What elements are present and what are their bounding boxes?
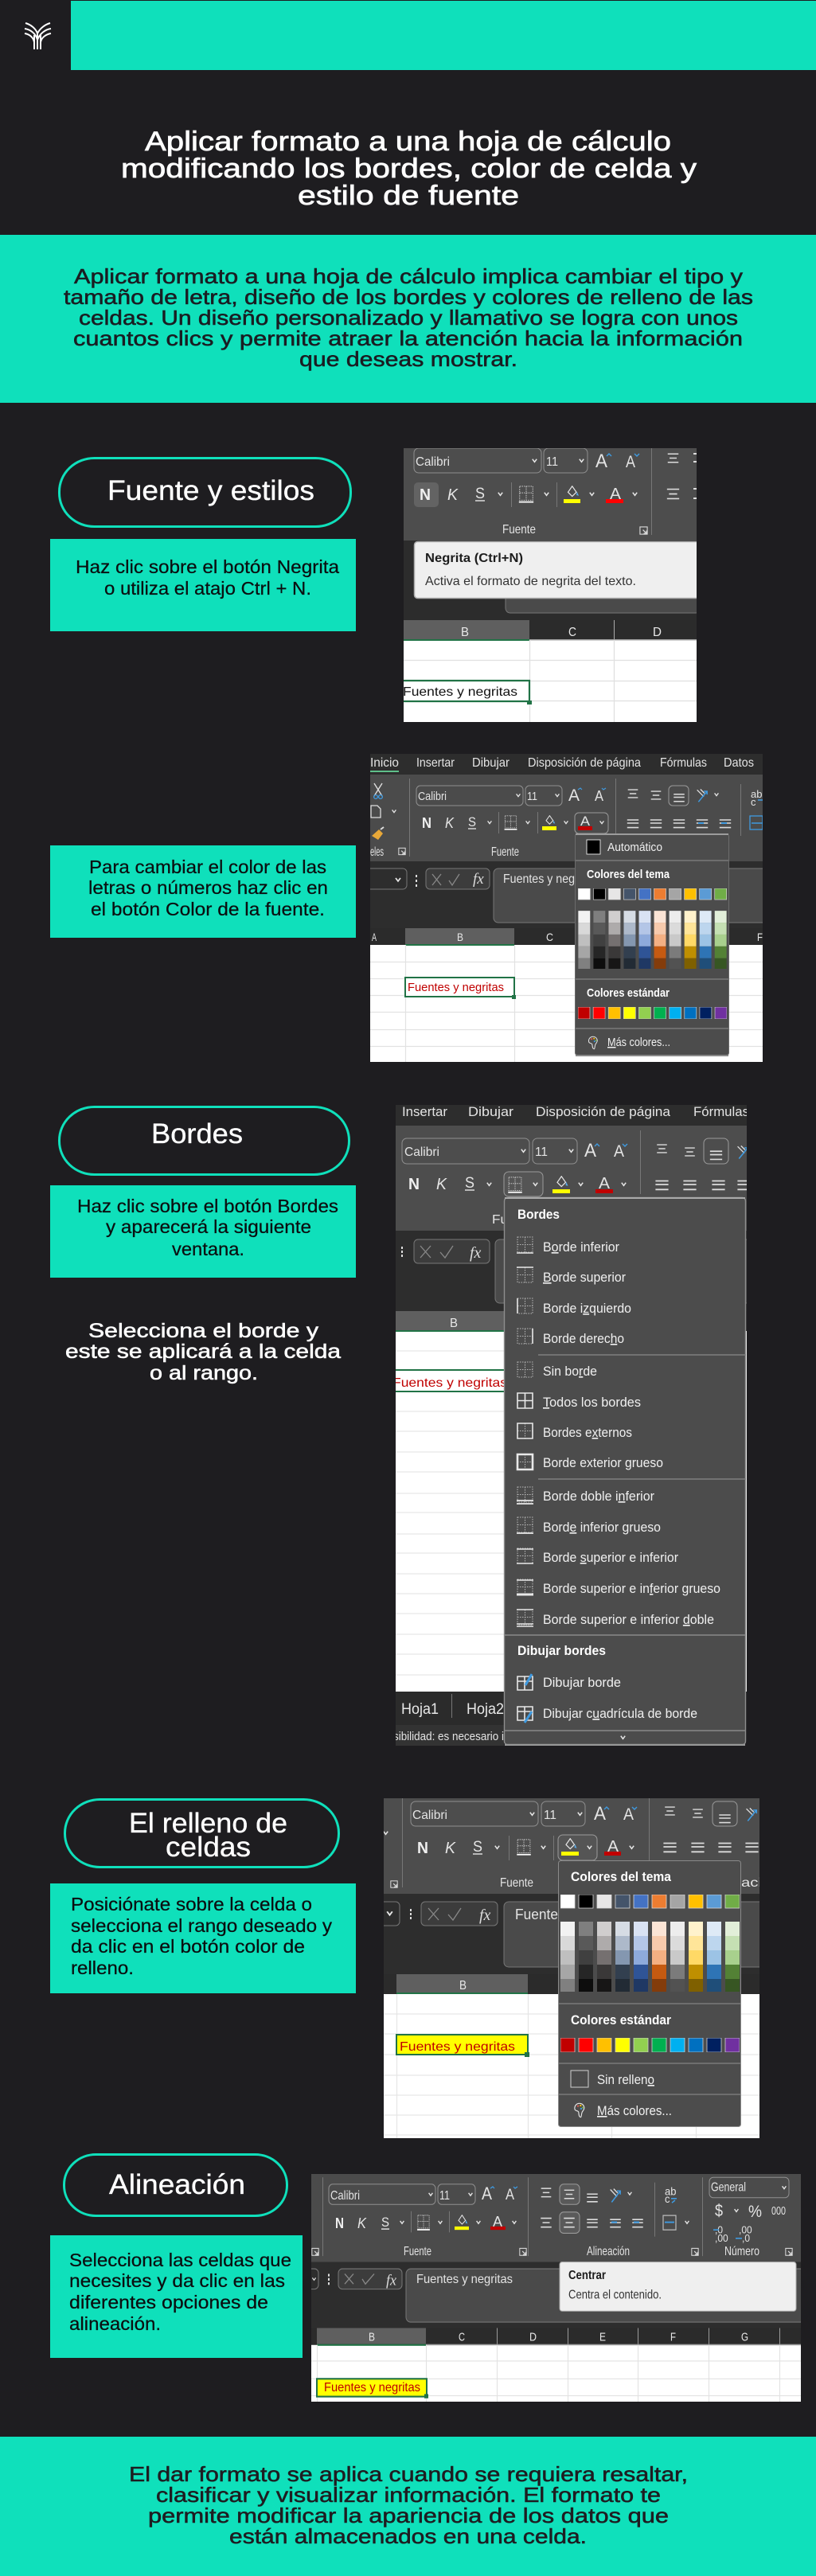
tooltip: negrita (414, 541, 701, 599)
callout: bordes: ventana. (172, 1239, 244, 1259)
screenshot: relleno: aci (741, 1876, 762, 1890)
title (121, 127, 697, 211)
heading pill: Bordes: Bordes (151, 1118, 243, 1149)
dropdown: color de fuente: Automático (607, 841, 662, 854)
dropdown: menú bordes: Borde exterior grueso (543, 1456, 663, 1470)
callout: relleno: Posiciónate sobre la celda o (71, 1894, 312, 1914)
screenshot: alineación: K (357, 2215, 367, 2231)
callout: alineación (50, 2235, 303, 2358)
screenshot: alineación: N (335, 2215, 344, 2231)
screenshot: negrita: 11 (546, 455, 558, 469)
screenshot: alineación: Fuente (404, 2245, 431, 2258)
screenshot: alineación: A (506, 2185, 515, 2203)
screenshot: color de fuente: B (457, 931, 463, 943)
dropdown: menú bordes: Borde derecho (543, 1332, 624, 1346)
screenshot: negrita: Fuentes y negritas (403, 685, 517, 699)
screenshot: bordes: 11 (535, 1146, 548, 1159)
screenshot: color de fuente: Calibri (418, 790, 447, 803)
closing band: están almacenados en una celda. (229, 2524, 587, 2548)
screenshot: relleno: 11 (544, 1809, 556, 1822)
screenshot: bordes: A (614, 1142, 624, 1161)
screenshot: bordes: A (584, 1140, 596, 1161)
dropdown: menú bordes: Borde superior e inferior grueso (543, 1582, 720, 1596)
screenshot: alineación: Calibri (330, 2189, 360, 2203)
callout: relleno: relleno. (71, 1957, 134, 1978)
dropdown: color de fuente (575, 834, 729, 1056)
heading pill: El relleno de celdas: celdas (166, 1832, 251, 1863)
dropdown: color de relleno: Colores estándar (571, 2012, 671, 2028)
screenshot: negrita (403, 448, 697, 722)
screenshot: alineación: Número (724, 2245, 759, 2258)
title: estilo de fuente (298, 181, 519, 211)
screenshot: alineación: E (599, 2331, 606, 2344)
callout: color de fuente: letras o números haz clic en (88, 877, 328, 898)
screenshot: bordes: A (599, 1175, 611, 1192)
dropdown: menú bordes: Borde superior e inferior doble (543, 1613, 714, 1627)
text: selecciona el borde: o al rango. (150, 1362, 258, 1384)
screenshot: color de fuente (370, 754, 763, 1062)
screenshot: negrita: N (420, 486, 431, 504)
screenshot: color de fuente: C (546, 931, 553, 943)
screenshot: alineación: F (670, 2331, 676, 2344)
screenshot: relleno: Fuente (515, 1907, 558, 1922)
screenshot: color de fuente: Disposición de página (528, 756, 641, 770)
screenshot: bordes (392, 1104, 749, 1746)
screenshot: alineación: General (711, 2180, 746, 2194)
callout: bordes: Haz clic sobre el botón Bordes (77, 1196, 338, 1216)
intro band: cuantos clics y permite atraer la atención hacia la información (73, 326, 743, 350)
screenshot: color de fuente: Fuentes y negritas (408, 981, 504, 994)
screenshot: bordes: K (436, 1176, 448, 1193)
screenshot: bordes: Hoja2 (467, 1701, 504, 1718)
dropdown: menú bordes: Borde superior e inferior (543, 1551, 678, 1565)
screenshot: color de fuente: A (595, 788, 603, 804)
screenshot: alineación: Fuentes y negritas (324, 2381, 420, 2395)
screenshot: color de fuente: S (468, 814, 476, 829)
title: Aplicar formato a una hoja de cálculo (145, 127, 671, 157)
intro band: tamaño de letra, diseño de los bordes y colores de relleno de las (64, 285, 753, 309)
dropdown: menú bordes: Dibujar borde (543, 1676, 621, 1690)
screenshot: color de fuente: eles (370, 845, 384, 859)
callout: alineación: diferentes opciones de (69, 2292, 268, 2313)
dropdown: menú bordes: Bordes externos (543, 1426, 632, 1440)
callout: relleno (50, 1883, 356, 1993)
screenshot: color de fuente: Fuente (491, 845, 519, 859)
callout: color de fuente: el botón Color de la fuente. (91, 899, 325, 919)
callout: negrita (50, 539, 356, 631)
dropdown: color de relleno (559, 1861, 740, 2127)
screenshot: color de fuente: Fuentes y neg (503, 872, 575, 886)
screenshot: negrita: A (610, 486, 622, 503)
intro band (0, 235, 816, 403)
screenshot: color de fuente: F (757, 931, 763, 943)
dropdown: menú bordes: Bordes (517, 1208, 560, 1222)
callout: bordes (50, 1185, 356, 1278)
screenshot: color de fuente: ab (751, 788, 762, 800)
screenshot: relleno: S (473, 1839, 482, 1856)
screenshot: alineación: 000 (771, 2205, 786, 2218)
icon: palm logo (25, 23, 51, 49)
callout: color de fuente (50, 845, 356, 938)
callout: negrita: Haz clic sobre el botón Negrita (76, 556, 339, 577)
tooltip: centrar: Centra el contenido. (568, 2288, 662, 2301)
screenshot: negrita: A (626, 453, 635, 471)
heading pill: El relleno de celdas: El relleno de (129, 1808, 287, 1839)
heading pill: Alineación: Alineación (109, 2169, 245, 2200)
screenshot: bordes: Hoja1 (401, 1701, 439, 1718)
screenshot: color de fuente: fx (473, 871, 484, 888)
screenshot: color de fuente: A (372, 931, 377, 943)
heading pill: Fuente y estilos (59, 459, 350, 527)
screenshot: relleno: Fuentes y negritas (400, 2040, 515, 2054)
dropdown: color de relleno: Más colores... (597, 2104, 672, 2118)
screenshot: color de fuente: 11 (527, 790, 537, 803)
screenshot: bordes: fx (470, 1244, 482, 1262)
screenshot: alineación: % (748, 2203, 762, 2221)
screenshot: negrita: Calibri (416, 455, 450, 469)
screenshot: relleno: N (417, 1840, 428, 1857)
screenshot: alineación: D (529, 2331, 537, 2344)
screenshot: alineación: A (482, 2183, 492, 2203)
screenshot: relleno: A (594, 1803, 606, 1825)
screenshot: bordes: N (408, 1176, 420, 1193)
screenshot: relleno: K (445, 1840, 457, 1857)
dropdown: menú bordes: Borde inferior grueso (543, 1520, 661, 1535)
dropdown: menú bordes (505, 1197, 746, 1745)
dropdown: menú bordes: Todos los bordes (543, 1395, 641, 1410)
screenshot: alineación: ,0 (742, 2233, 750, 2244)
screenshot: alineación: G (741, 2331, 748, 2344)
screenshot: alineación: C (459, 2331, 465, 2344)
dropdown: menú bordes: Borde inferior (543, 1240, 619, 1255)
icon: cuadrículas de borde (517, 1237, 533, 1625)
screenshot: color de fuente: Fórmulas (660, 756, 707, 770)
heading pill: Bordes (59, 1107, 349, 1175)
dropdown: color de relleno: Sin relleno (597, 2073, 654, 2087)
screenshot: alineación: Fuentes y negritas (416, 2273, 513, 2286)
screenshot: negrita: C (568, 626, 576, 639)
screenshot: color de fuente: N (422, 815, 431, 831)
callout: color de fuente: Para cambiar el color de las (89, 857, 326, 877)
heading pill: Fuente y estilos: Fuente y estilos (107, 475, 314, 506)
screenshot: relleno (384, 1798, 762, 2138)
screenshot: relleno: B (459, 1979, 467, 1992)
screenshot: bordes: Dibujar (468, 1104, 513, 1119)
screenshot: bordes: Calibri (404, 1146, 439, 1159)
top banner (0, 1, 816, 70)
callout: negrita: o utiliza el atajo Ctrl + N. (104, 578, 311, 599)
screenshot: negrita: B (461, 626, 469, 639)
text: selecciona el borde: este se aplicará a la celda (65, 1341, 341, 1363)
dropdown: menú bordes: Dibujar cuadrícula de borde (543, 1707, 697, 1721)
screenshot: alineación: $ (715, 2202, 723, 2220)
screenshot: relleno: Calibri (412, 1809, 447, 1822)
closing band: clasificar y visualizar información. El formato te (156, 2483, 661, 2507)
screenshot: color de fuente: A (580, 814, 591, 829)
screenshot: color de fuente: Dibujar (472, 756, 510, 770)
screenshot: bordes: Insertar (402, 1104, 447, 1119)
screenshot: bordes: sibilidad: es necesario i (393, 1731, 504, 1743)
screenshot: negrita: K (447, 486, 459, 504)
dropdown: menú bordes: Borde superior (543, 1270, 626, 1285)
callout: alineación: necesites y da clic en las (69, 2270, 285, 2291)
screenshot: alineación: c (665, 2193, 670, 2205)
screenshot: color de fuente: Datos (724, 756, 754, 770)
screenshot: color de fuente: K (445, 815, 455, 831)
callout: relleno: selecciona el rango deseado y (71, 1915, 333, 1936)
intro band: celdas. Un diseño personalizado y llamativo se logra con unos (79, 306, 738, 330)
heading pill: Alineación (64, 2154, 287, 2216)
title: modificando los bordes, color de celda y (121, 154, 697, 184)
callout: alineación: Selecciona las celdas que (69, 2250, 291, 2270)
screenshot: relleno: fx (479, 1907, 491, 1924)
callout: alineación: alineación. (69, 2313, 161, 2334)
dropdown: menú bordes: Dibujar bordes (517, 1644, 606, 1658)
text: selecciona el borde: Selecciona el borde y (88, 1320, 319, 1342)
screenshot: alineación: B (369, 2331, 375, 2344)
screenshot: alineación (311, 2174, 801, 2402)
callout: relleno: da clic en el botón color de (71, 1936, 305, 1957)
screenshot: color de fuente: Inicio (370, 756, 399, 770)
screenshot: bordes: Fórmulas (693, 1104, 749, 1119)
dropdown: menú bordes: Borde doble inferior (543, 1489, 654, 1504)
intro band: Aplicar formato a una hoja de cálculo implica cambiar el tipo y (74, 264, 743, 288)
closing band: permite modificar la apariencia de los datos que (148, 2504, 669, 2527)
dropdown: color de relleno: Colores del tema (571, 1869, 671, 1884)
intro band: que deseas mostrar. (299, 347, 517, 371)
closing band: El dar formato se aplica cuando se requiera resaltar, (129, 2462, 688, 2486)
screenshot: alineación: A (493, 2213, 502, 2230)
screenshot: alineación: Alineación (587, 2245, 630, 2258)
screenshot: alineación: ,0 (715, 2224, 723, 2236)
screenshot: color de fuente: Insertar (416, 756, 455, 770)
dropdown: menú bordes: Borde izquierdo (543, 1302, 631, 1316)
screenshot: alineación: fx (386, 2272, 397, 2289)
screenshot: negrita: D (653, 626, 662, 639)
screenshot: color de fuente: c (751, 796, 756, 808)
dropdown: color de fuente: Más colores... (607, 1036, 670, 1049)
tooltip: centrar: Centrar (568, 2268, 606, 2282)
tooltip: negrita: Negrita (Ctrl+N) (425, 552, 523, 565)
text: selecciona el borde (65, 1320, 341, 1384)
screenshot: negrita: S (475, 486, 485, 502)
tooltip: centrar (560, 2262, 796, 2311)
screenshot: bordes: Fu (492, 1213, 508, 1227)
screenshot: bordes: B (450, 1317, 458, 1330)
screenshot: relleno: Fuente (500, 1876, 533, 1890)
screenshot: alineación: ,00 (739, 2224, 752, 2236)
screenshot: negrita: Fuente (502, 523, 536, 537)
heading pill: El relleno de celdas (65, 1799, 339, 1868)
screenshot: negrita: A (595, 451, 607, 472)
screenshot: alineación: S (381, 2215, 389, 2230)
closing band (0, 2437, 816, 2576)
screenshot: bordes: Fuentes y negritas (392, 1376, 507, 1390)
screenshot: color de fuente: A (568, 786, 580, 805)
callout: bordes: y aparecerá la siguiente (106, 1216, 311, 1237)
tooltip: negrita: Activa el formato de negrita del texto. (425, 575, 636, 588)
dropdown: color de fuente: Colores del tema (587, 868, 670, 881)
screenshot: bordes: Disposición de página (536, 1104, 671, 1119)
screenshot: alineación: 11 (439, 2189, 450, 2203)
screenshot: bordes: S (465, 1175, 474, 1192)
screenshot: alineación: ab (665, 2185, 676, 2198)
screenshot: relleno: A (623, 1805, 634, 1824)
dropdown: color de fuente: Colores estándar (587, 986, 670, 1000)
screenshot: alineación: ,00 (715, 2233, 728, 2244)
dropdown: menú bordes: Sin borde (543, 1364, 597, 1379)
screenshot: relleno: A (607, 1838, 619, 1856)
